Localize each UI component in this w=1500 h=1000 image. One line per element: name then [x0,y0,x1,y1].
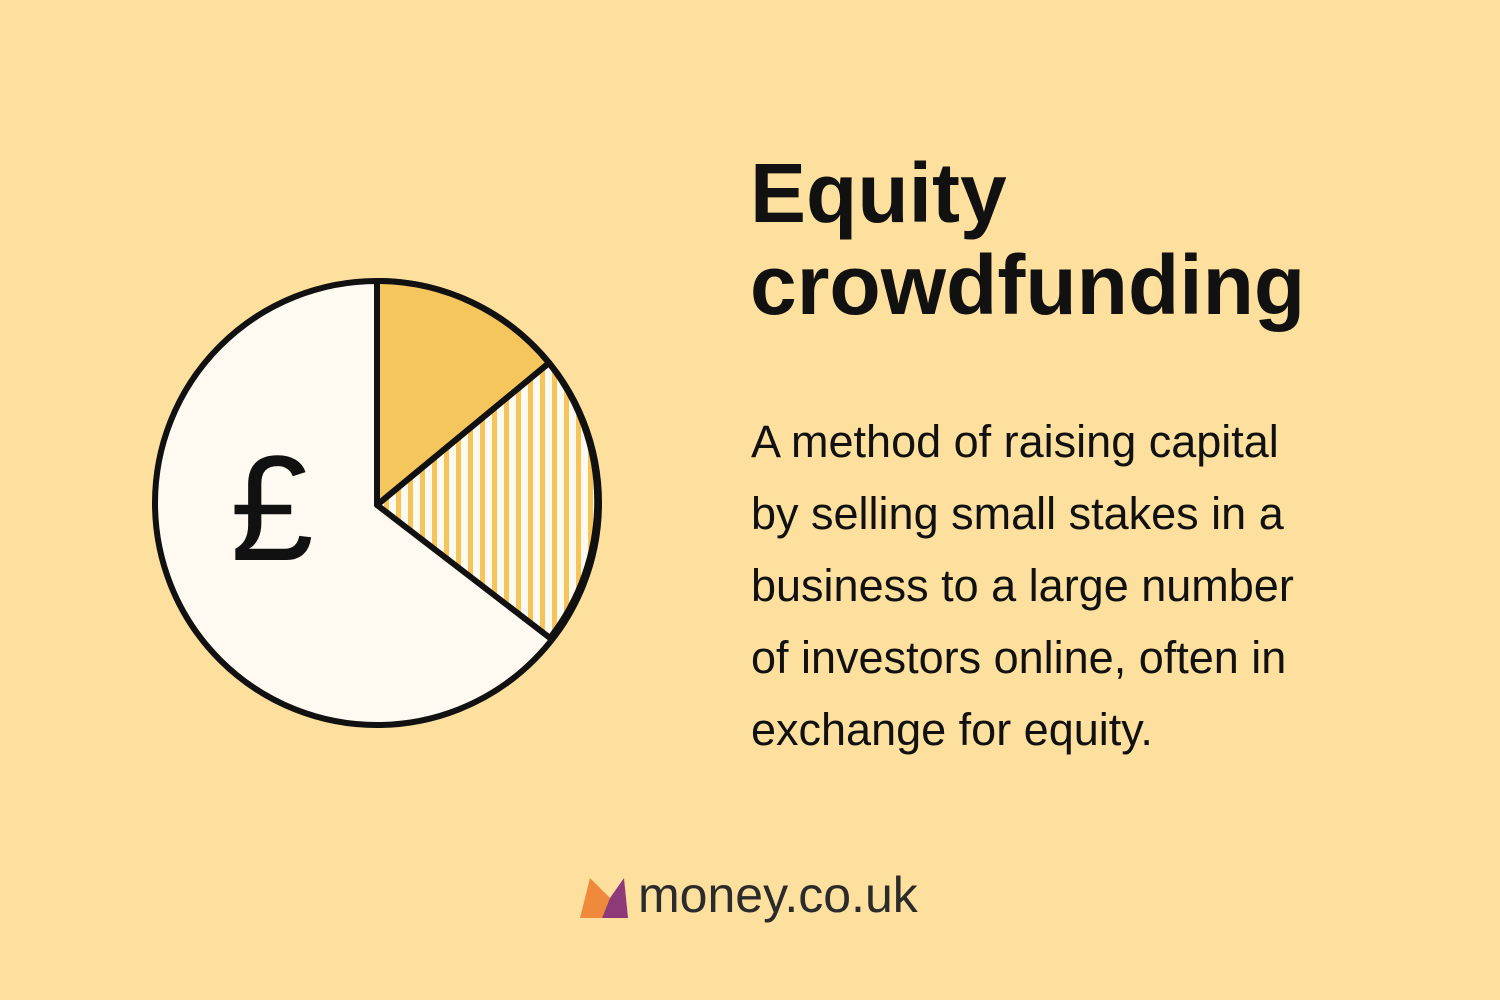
description text: of investors online, often in [751,632,1286,683]
logo: money.co.uk: money.co.uk [638,867,918,923]
pie chart illustration [152,278,602,728]
pie chart illustration: £ [230,424,314,592]
description text [751,416,1294,755]
description text: exchange for equity. [751,704,1153,755]
title: Equity [750,146,1007,240]
description text: by selling small stakes in a [751,488,1284,539]
description text: business to a large number [751,560,1294,611]
title [750,146,1305,332]
description text: A method of raising capital [751,416,1279,467]
title: crowdfunding [750,238,1305,332]
